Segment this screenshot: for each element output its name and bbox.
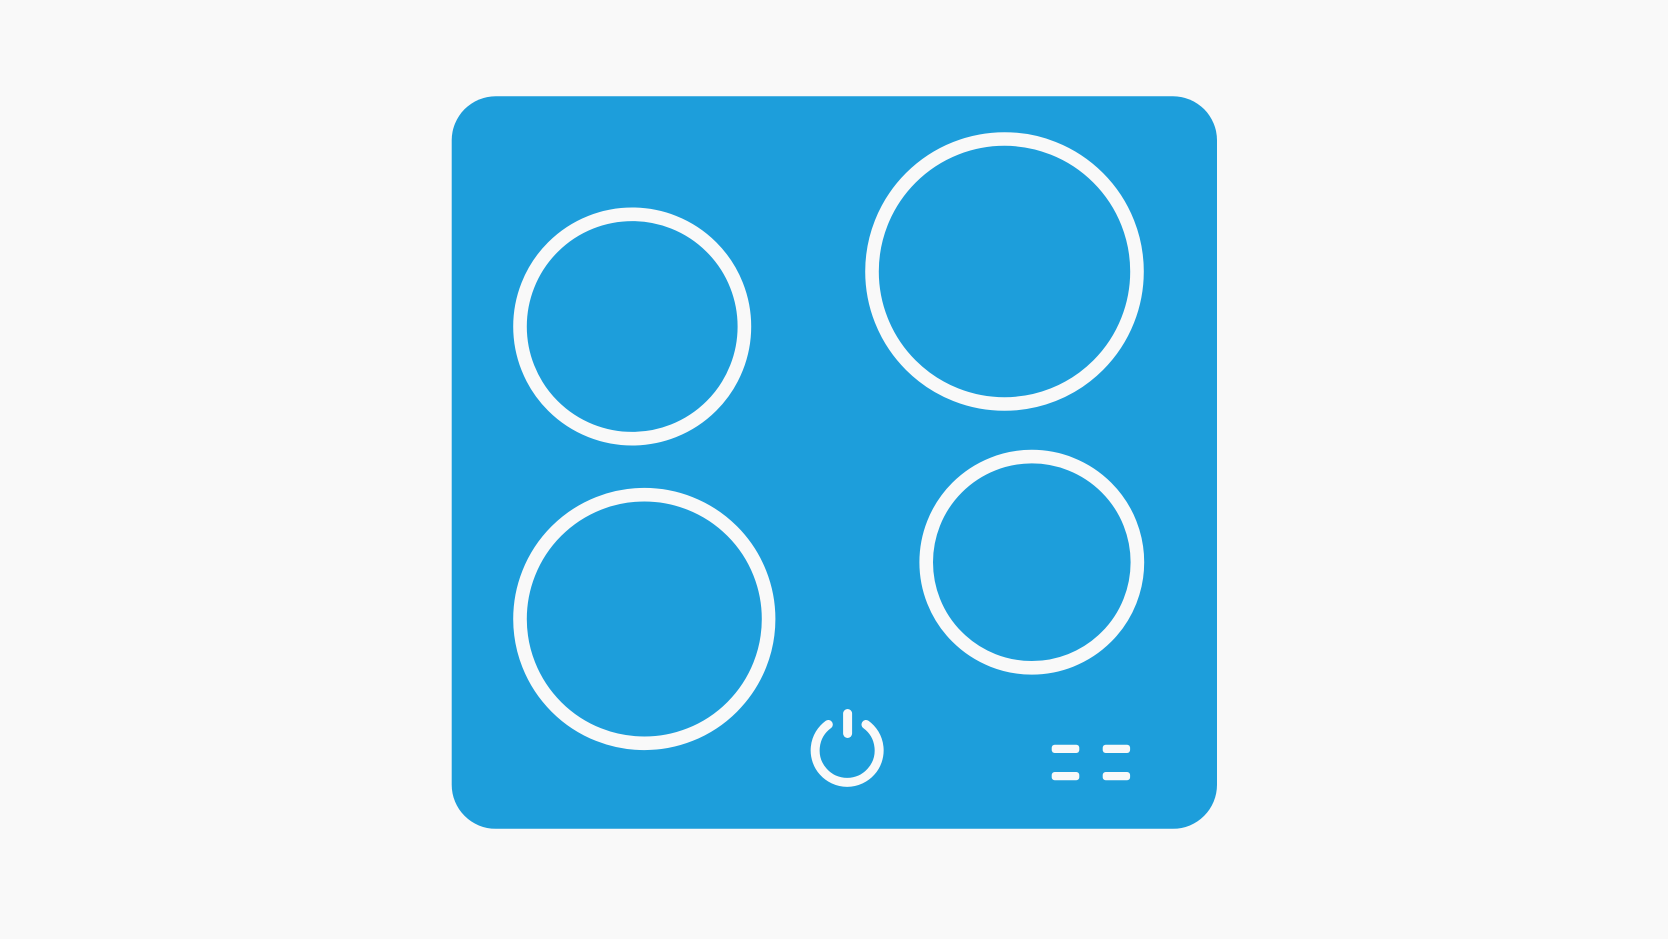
panel: cooktop surface: [452, 96, 1217, 829]
controls: touch sliders: [1052, 745, 1130, 780]
burner: bottom right: [926, 457, 1137, 668]
burner: top left: [520, 214, 744, 439]
icon: power button: [815, 714, 879, 782]
burner: bottom left: [520, 495, 769, 743]
burner: top right: [872, 139, 1137, 404]
